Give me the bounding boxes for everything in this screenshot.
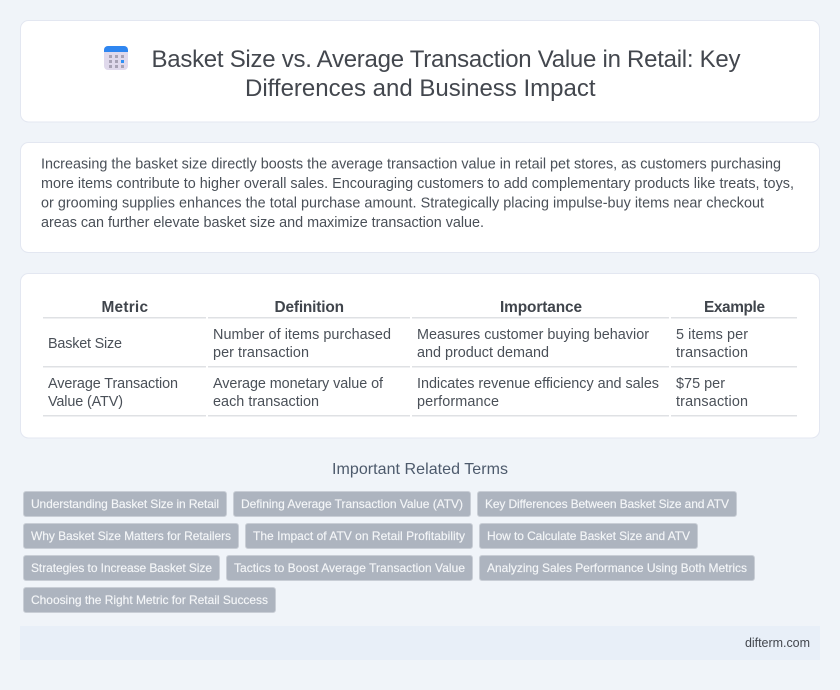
table row: basket size: Basket Size xyxy=(48,336,122,352)
table row: basket size xyxy=(48,327,748,361)
intro text: areas can further elevate basket size and maximize transaction value. xyxy=(41,215,484,231)
table row: average transaction value xyxy=(48,376,748,410)
table header row: Importance xyxy=(500,299,582,316)
chip xyxy=(234,492,470,516)
chip: Tactics to Boost Average Transaction Value xyxy=(234,561,465,575)
chip: Key Differences Between Basket Size and ATV xyxy=(485,497,729,511)
table row: average transaction value: Value (ATV) xyxy=(48,394,123,410)
chip: Strategies to Increase Basket Size xyxy=(31,561,212,575)
table row: average transaction value: each transaction xyxy=(213,394,319,410)
related term chips xyxy=(24,492,754,612)
table row: basket size: transaction xyxy=(676,345,748,361)
chip xyxy=(24,524,238,548)
table row: average transaction value: Average Transaction xyxy=(48,376,178,392)
chip: Defining Average Transaction Value (ATV) xyxy=(241,497,463,511)
table row: average transaction value: performance xyxy=(417,394,499,410)
chip xyxy=(24,588,276,612)
table row: basket size: Measures customer buying behavior xyxy=(417,327,649,343)
table row: average transaction value: Average monetary value of xyxy=(213,376,384,392)
chip xyxy=(24,492,226,516)
table row: average transaction value: $75 per xyxy=(676,376,725,392)
chip: Why Basket Size Matters for Retailers xyxy=(31,529,231,543)
intro text: Increasing the basket size directly boosts the average transaction value in retail pet stores, as customers purchasing xyxy=(41,156,781,172)
intro text: or grooming supplies enhances the total purchase amount. Strategically placing impulse-buy items near checkout xyxy=(41,196,764,212)
chip xyxy=(480,524,698,548)
intro text xyxy=(41,156,794,231)
table row: basket size: Number of items purchased xyxy=(213,327,391,343)
chip: Choosing the Right Metric for Retail Success xyxy=(31,593,268,607)
table header row xyxy=(102,299,765,316)
chip: Analyzing Sales Performance Using Both Metrics xyxy=(487,561,747,575)
panel: intro xyxy=(20,142,820,252)
table row: basket size: 5 items per xyxy=(676,327,748,343)
title: Differences and Business Impact xyxy=(245,75,596,102)
panel: comparison table xyxy=(20,274,820,438)
heading: important related terms: Important Related Terms xyxy=(332,461,508,478)
chip: How to Calculate Basket Size and ATV xyxy=(487,529,690,543)
chip xyxy=(246,524,472,548)
table header row: Definition xyxy=(274,299,344,316)
chip xyxy=(478,492,736,516)
panel: header xyxy=(20,20,820,122)
table row: basket size: per transaction xyxy=(213,345,309,361)
chip xyxy=(226,556,472,580)
table row: average transaction value: transaction xyxy=(676,394,748,410)
chip: The Impact of ATV on Retail Profitability xyxy=(253,529,465,543)
intro text: more items contribute to higher overall sales. Encouraging customers to add complementary products like treats, toys, xyxy=(41,176,794,192)
table row: average transaction value: Indicates revenue efficiency and sales xyxy=(417,376,659,392)
footer: difterm.com xyxy=(745,636,810,650)
chip: Understanding Basket Size in Retail xyxy=(31,497,219,511)
icon: calendar xyxy=(104,46,128,70)
title xyxy=(152,46,740,102)
chip xyxy=(24,556,220,580)
table header row: Example xyxy=(704,299,765,316)
table header row: Metric xyxy=(102,299,148,316)
table row: basket size: and product demand xyxy=(417,345,549,361)
footer xyxy=(20,626,820,660)
title: Basket Size vs. Average Transaction Value in Retail: Key xyxy=(152,46,740,73)
chip xyxy=(480,556,754,580)
